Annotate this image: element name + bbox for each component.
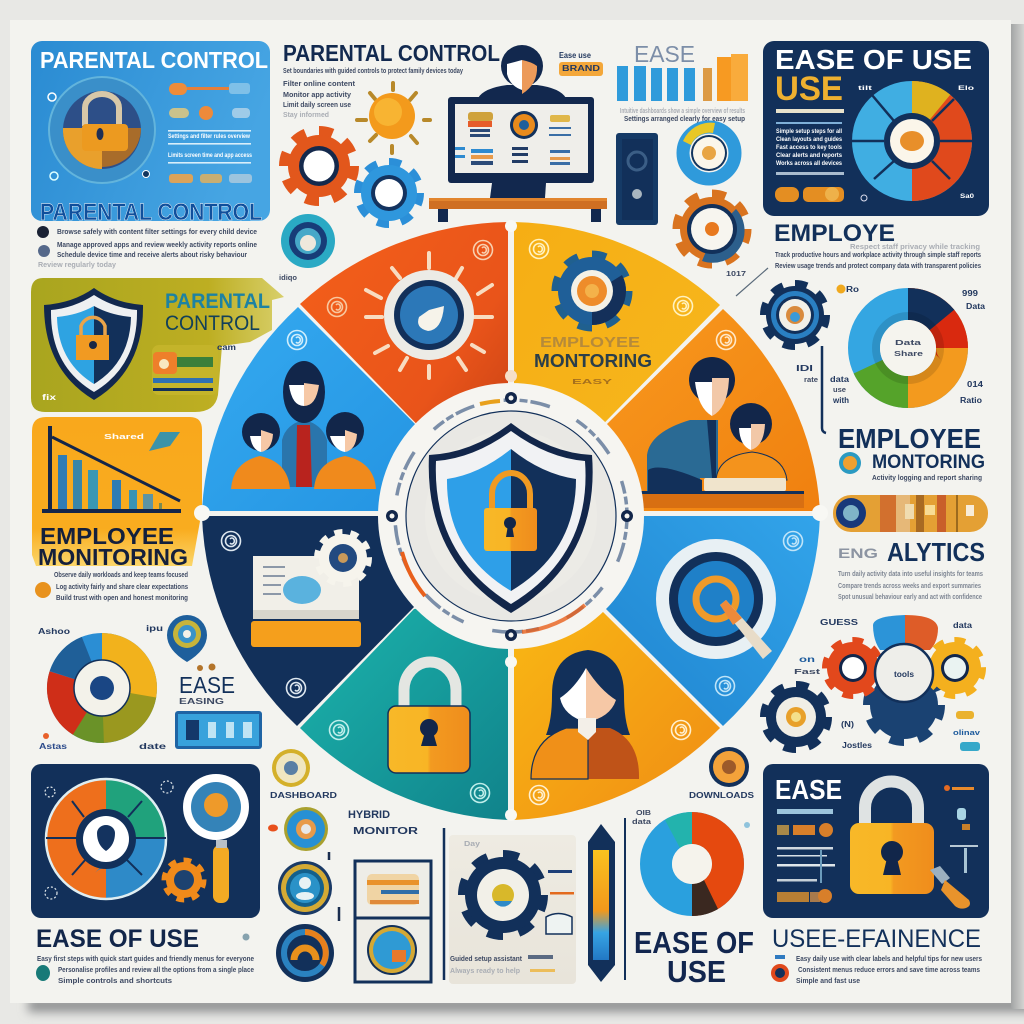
red gear <box>827 642 879 694</box>
label: hybrid <box>348 809 419 837</box>
heading: analytics: ENG <box>838 545 878 561</box>
panel controls: Settings and filter rules overview <box>168 134 250 140</box>
text block: employe description: Track productive hours and workplace activity through simple staff reports <box>775 252 981 259</box>
text block: parental description <box>283 68 463 119</box>
heading: ease of use large <box>634 925 754 989</box>
panel: bottom left navy card <box>31 764 260 918</box>
text block: parental description: Monitor app activity <box>283 92 351 99</box>
text lines: Clear alerts and reports <box>776 153 843 159</box>
pill: monitoring timeline <box>833 495 988 532</box>
heading: analytics <box>838 537 985 567</box>
panel: gear card <box>449 835 576 984</box>
icon: navy gear <box>766 687 826 747</box>
text lines: Works across all devices <box>776 161 843 167</box>
text block: ease notes: Personalise profiles and review all the options from a single place <box>58 967 254 974</box>
bracket with labels: IDI <box>796 364 813 373</box>
icon: central shield <box>429 423 593 613</box>
buttons <box>775 187 844 202</box>
heading: montoring <box>839 452 985 482</box>
text block: parental control notes <box>37 226 257 269</box>
icon: gear <box>558 257 626 325</box>
icon: blue ring <box>268 807 328 851</box>
text lines: Simple setup steps for all <box>776 129 842 135</box>
heading: parental control: PARENTAL CONTROL <box>40 47 268 73</box>
bracket with labels: data <box>830 375 850 384</box>
icon: blue gear <box>360 164 418 222</box>
connector line <box>736 268 768 296</box>
card icon <box>152 345 218 395</box>
heading: ease of use large: EASE OF <box>634 925 754 960</box>
icon: navy small ring: DOWNLOADS <box>689 791 755 800</box>
segment: card navy <box>202 516 414 726</box>
icon: tower device <box>616 133 658 225</box>
mini labels <box>858 86 975 201</box>
icon: orange gear <box>286 133 352 199</box>
badge: ease <box>559 51 603 76</box>
icon: gear <box>465 857 541 933</box>
panel: gear card: Day <box>464 841 480 848</box>
right items <box>944 785 978 873</box>
small marks <box>329 852 339 921</box>
chart: central wheel <box>194 220 828 821</box>
panel: gear card: Guided setup assistant <box>450 956 523 963</box>
heading: employee: EMPLOYEE <box>838 423 981 454</box>
segment: lock teal <box>300 600 508 820</box>
segment: gear yellow <box>511 222 720 518</box>
heading: ease: EASE <box>775 774 842 805</box>
text block: analytics: Turn daily activity data into useful insights for teams <box>838 571 983 578</box>
cluster labels: (N) <box>841 720 854 729</box>
panel: parental control olive card <box>31 278 284 412</box>
small label: EASY <box>572 379 613 386</box>
top blob <box>873 615 938 650</box>
donut labels: 999 <box>962 289 979 298</box>
icon: profile ring <box>278 861 332 915</box>
pie chart <box>852 95 972 184</box>
cluster labels: on <box>799 655 815 664</box>
text block: ease notes <box>36 934 254 985</box>
text block: monitoring notes: Log activity fairly and share clear expectations <box>56 584 188 591</box>
panel: parental control blue card <box>31 41 270 226</box>
cluster labels <box>794 618 980 751</box>
gear <box>165 861 203 899</box>
bar chart <box>42 426 181 512</box>
hub <box>378 383 644 649</box>
text block: parental description: Filter online content <box>283 81 356 88</box>
heading: usee-efainence: USEE-EFAINENCE <box>772 925 981 953</box>
heading: parental control lower: PARENTAL CONTROL <box>40 199 262 226</box>
text lines: Fast access to key tools <box>776 145 843 151</box>
hub dots <box>386 392 633 641</box>
text block: parental description: Limit daily screen use <box>283 102 351 109</box>
navy gear <box>870 671 938 739</box>
center hub <box>875 644 933 702</box>
bracket with labels <box>796 346 850 433</box>
heading: employee monitoring: EMPLOYEE <box>40 523 174 549</box>
panel: ease lock navy card <box>763 764 989 918</box>
text block: monitoring notes: Observe daily workloads and keep teams focused <box>54 572 188 579</box>
text block: analytics: Compare trends across weeks and export summaries <box>838 583 981 590</box>
text block: analytics <box>838 571 983 601</box>
segment: woman yellow <box>514 600 720 820</box>
label: hybrid: MONITOR <box>353 826 419 837</box>
bracket with labels: rate <box>804 377 818 384</box>
text block: employe description: Review usage trends and protect company data with transparent policies <box>775 263 981 270</box>
text block: parental control notes: Schedule device time and receive alerts about risky behaviour <box>57 252 247 259</box>
donut labels: OIB <box>636 810 651 817</box>
icon: family <box>231 361 376 489</box>
text block: ease notes: Easy first steps with quick start guides and friendly menus for everyone <box>37 956 254 963</box>
icon: yellow ring <box>270 749 337 800</box>
paper shadow right <box>1011 24 1024 1009</box>
stand <box>490 183 546 198</box>
mini icons <box>45 781 173 899</box>
heading: parental control top: PARENTAL CONTROL <box>283 40 500 66</box>
lock <box>484 473 537 551</box>
icon: settings card <box>251 534 367 647</box>
bracket with labels: with <box>832 396 849 405</box>
icon: teal ring <box>281 214 335 268</box>
mini labels: Elo <box>958 86 975 92</box>
text block: efficiency notes: Consistent menus reduce errors and save time across teams <box>798 967 980 974</box>
heading: montoring: Activity logging and report sharing <box>872 475 982 482</box>
icon: sun <box>357 83 430 153</box>
donut labels <box>960 289 986 405</box>
heading: employee monitoring: MONITORING <box>38 544 188 570</box>
icon: sun eye <box>366 253 492 378</box>
label <box>836 284 859 294</box>
donut labels: data <box>632 819 651 826</box>
donut chart: left <box>46 632 158 744</box>
text block: parental control notes: Browse safely with content filter settings for every child device <box>57 229 257 236</box>
heading: use: USE <box>775 70 843 108</box>
heading: parental control olive: PARENTAL <box>165 290 270 313</box>
label: hybrid: HYBRID <box>348 809 390 821</box>
heading: parental control olive: CONTROL <box>165 312 260 335</box>
cluster labels: GUESS <box>820 618 859 627</box>
segment: sun red orange <box>300 222 508 518</box>
donut chart: bottom <box>656 812 744 916</box>
donut labels: Data <box>966 302 986 311</box>
icon: yellow ring: DASHBOARD <box>270 791 337 800</box>
text block: efficiency notes: Simple and fast use <box>796 978 860 985</box>
cluster labels: Jostles <box>842 741 873 750</box>
label: fix <box>42 393 57 402</box>
icon: navy ring <box>276 924 334 982</box>
cluster labels: olinav <box>953 730 980 737</box>
bar chart: ease: EASE <box>634 41 695 67</box>
label: 1017 <box>726 271 746 278</box>
panel controls <box>168 83 253 183</box>
mini labels: tilt <box>858 86 872 92</box>
icon: navy ring gear <box>766 286 824 344</box>
icon: pin ring <box>167 615 216 671</box>
text block: monitoring notes: Build trust with open and honest monitoring <box>56 595 188 602</box>
icon: woman <box>531 650 639 779</box>
text block: parental control notes: Review regularly today <box>38 262 116 269</box>
cluster labels: Fast <box>794 669 821 676</box>
hub text ring <box>395 400 627 632</box>
text block: efficiency notes <box>771 955 982 985</box>
faded heading: EMPLOYEE <box>540 334 640 351</box>
label: cam <box>217 343 236 352</box>
left items <box>777 809 835 903</box>
segment: target blue <box>600 516 820 726</box>
donut labels: Ratio <box>960 396 982 405</box>
text block: parental description: Stay informed <box>283 112 329 119</box>
donut labels: ipu <box>146 624 163 633</box>
icon: padlock <box>850 782 970 909</box>
text lines: Clean layouts and guides <box>776 137 843 143</box>
label: Ro <box>846 285 859 294</box>
heading: analytics: ALYTICS <box>887 537 985 567</box>
badge: ease: Ease use <box>559 51 591 60</box>
segment: family blue <box>202 307 416 511</box>
label: idiqo <box>279 275 297 282</box>
heading: ease: EASE <box>179 672 235 698</box>
icon: lock <box>388 662 470 773</box>
text block: employe description: Respect staff privacy while tracking <box>850 244 980 251</box>
bar chart: ease: Settings arranged clearly for easy setup <box>624 116 745 123</box>
bar chart: ease <box>617 41 748 123</box>
icon: person at computer <box>429 45 607 222</box>
icon: lock emblem <box>48 77 155 183</box>
donut labels: 014 <box>967 380 984 389</box>
icon: gear cluster: tools <box>894 670 915 679</box>
panel: framed cards <box>355 861 431 982</box>
heading: ease of use large: USE <box>667 954 726 989</box>
cluster labels: data <box>953 621 973 630</box>
wheel joints <box>194 220 828 821</box>
donut chart: employee <box>864 304 952 392</box>
magnifier <box>183 774 249 903</box>
icon: orange navy gear <box>679 196 745 263</box>
panel: gear card: Always ready to help <box>450 968 520 975</box>
badge: ease: BRAND <box>562 64 600 73</box>
donut chart: employee: Data <box>895 340 921 347</box>
text block: parental description: Set boundaries with guided controls to protect family devices today <box>283 68 463 75</box>
text block: parental control notes: Manage approved apps and review weekly activity reports online <box>57 242 257 249</box>
panel controls: Limits screen time and app access <box>168 153 253 159</box>
mini labels: Sa0 <box>960 194 975 200</box>
heading: ease of use: EASE OF USE <box>36 925 199 953</box>
icon: parent and child <box>639 357 804 508</box>
icon: target <box>656 539 776 659</box>
pie chart <box>46 779 166 899</box>
paper shadow bottom <box>28 998 1024 1012</box>
bar chart: ease: Intuitive dashboards show a simple overview of results <box>620 108 745 115</box>
text block: efficiency notes: Easy daily use with clear labels and helpful tips for new users <box>796 956 982 963</box>
icon: color ring <box>683 123 735 179</box>
heading: monitoring: MONTORING <box>534 351 652 371</box>
icon: gear cluster <box>827 615 981 739</box>
text block: ease notes: Simple controls and shortcuts <box>58 978 172 985</box>
icon: navy small ring <box>689 747 755 800</box>
panel: ease of use navy card <box>763 41 989 216</box>
panel: employee monitoring orange card <box>32 417 202 570</box>
icon: shield <box>44 288 143 400</box>
tube gauge <box>588 824 615 982</box>
heading: ease: EASING <box>179 697 224 706</box>
donut chart: employee: Share <box>894 351 923 358</box>
heading: ease of use: EASE OF USE <box>775 44 972 75</box>
divider <box>443 828 445 980</box>
bracket with labels: use <box>833 387 846 394</box>
heading: parental control olive <box>165 290 270 335</box>
text block: employe description <box>775 244 981 270</box>
donut labels: Astas <box>39 742 68 751</box>
donut labels <box>38 624 167 751</box>
donut labels: date <box>139 742 167 751</box>
heading: employee monitoring <box>38 523 188 570</box>
bar chart: Shared <box>104 434 144 441</box>
text lines <box>776 109 844 175</box>
yellow gear <box>929 642 981 694</box>
text block: analytics: Spot unusual behaviour early and act with confidence <box>838 594 982 601</box>
monitor <box>448 97 594 183</box>
side lines <box>546 870 574 934</box>
text block: monitoring notes <box>35 572 188 602</box>
person <box>478 45 566 98</box>
heading: employe: EMPLOYE <box>774 220 895 247</box>
divider <box>624 818 626 980</box>
segment: parent child orange <box>600 309 820 511</box>
card: blue <box>175 711 262 749</box>
desk <box>429 198 607 222</box>
heading: montoring: MONTORING <box>872 452 985 473</box>
donut labels: Ashoo <box>38 627 70 636</box>
donut labels <box>632 810 750 828</box>
